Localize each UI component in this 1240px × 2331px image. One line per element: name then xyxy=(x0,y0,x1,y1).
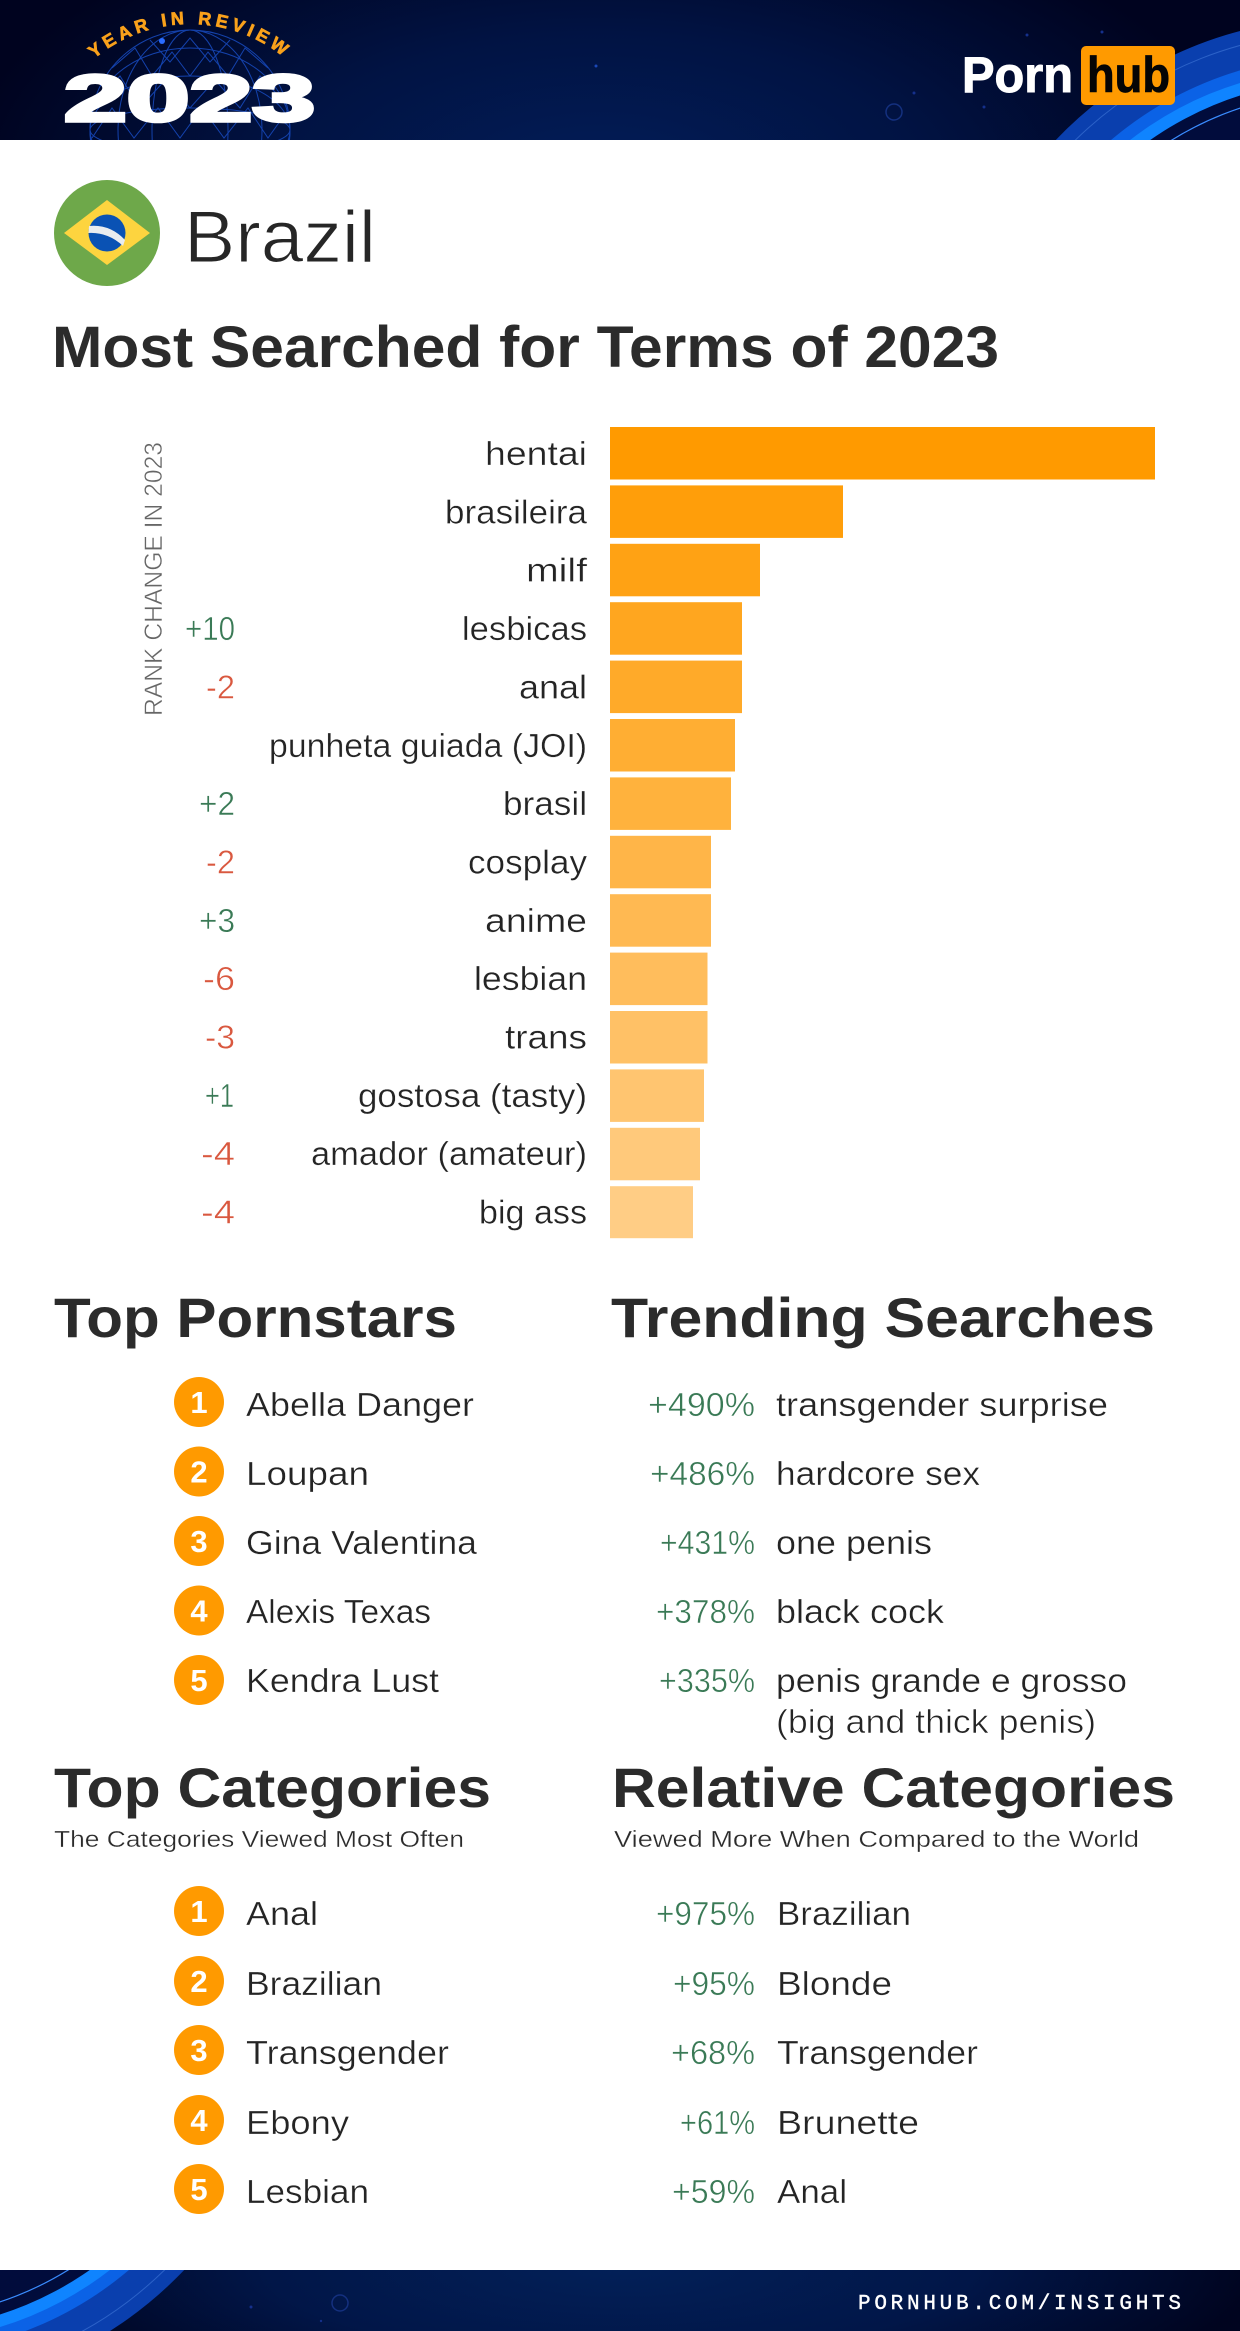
footer banner xyxy=(0,2270,1240,2331)
term labels: amador (amateur) xyxy=(311,1135,587,1172)
ranked list: Lesbian xyxy=(246,2173,369,2210)
term labels: anal xyxy=(519,668,587,705)
term labels: anime xyxy=(485,902,587,939)
trending list: +335% xyxy=(659,1662,755,1699)
ranked list xyxy=(174,1377,478,1705)
rank changes: +10 xyxy=(185,610,235,647)
trending list: black cock xyxy=(776,1593,945,1630)
title: Most Searched for Terms of 2023 xyxy=(52,315,999,380)
term labels: big ass xyxy=(479,1194,587,1231)
relative list: +68% xyxy=(671,2034,755,2071)
rank changes: -2 xyxy=(206,668,235,705)
term labels: brasileira xyxy=(445,493,588,530)
ranked list: Transgender xyxy=(246,2034,449,2071)
term labels: punheta guiada (JOI) xyxy=(269,727,587,764)
trending list: (big and thick penis) xyxy=(776,1703,1096,1740)
panel: top pornstars xyxy=(54,1286,478,1705)
ranked list: 4 xyxy=(190,1594,208,1628)
brand logo: hub xyxy=(1087,47,1170,103)
ranked list: Gina Valentina xyxy=(246,1524,478,1561)
header banner xyxy=(0,0,1240,140)
rank changes: -4 xyxy=(201,1135,235,1172)
heading: Trending Searches xyxy=(611,1286,1155,1349)
relative list: Blonde xyxy=(777,1965,892,2002)
ranked list: 1 xyxy=(190,1894,208,1929)
term labels: cosplay xyxy=(468,844,588,880)
decorative arcs top right xyxy=(594,30,1240,140)
ranked list: Brazilian xyxy=(246,1965,382,2002)
trending list xyxy=(648,1386,1127,1740)
rank changes: -4 xyxy=(201,1194,235,1231)
country heading xyxy=(54,180,376,286)
term labels: gostosa (tasty) xyxy=(358,1077,587,1114)
rank changes: -2 xyxy=(206,844,235,880)
rank change axis label: RANK CHANGE IN 2023 xyxy=(140,442,168,716)
relative list xyxy=(656,1895,978,2210)
relative list: +59% xyxy=(672,2173,755,2210)
subheading: The Categories Viewed Most Often xyxy=(54,1826,464,1852)
trending list: +486% xyxy=(650,1455,755,1492)
ranked list: Abella Danger xyxy=(246,1386,474,1423)
term labels: brasil xyxy=(503,785,587,822)
trending list: +490% xyxy=(648,1386,755,1423)
relative list: +95% xyxy=(673,1965,755,2002)
heading: Relative Categories xyxy=(612,1756,1175,1819)
rank changes: -6 xyxy=(203,960,235,997)
footer url: PORNHUB.COM/INSIGHTS xyxy=(858,2293,1181,2316)
panel: trending searches xyxy=(611,1286,1155,1740)
rank changes: +1 xyxy=(205,1077,234,1114)
trending list: hardcore sex xyxy=(776,1455,981,1492)
ranked list: 1 xyxy=(190,1385,208,1420)
brand logo: Porn xyxy=(962,47,1073,103)
trending list: transgender surprise xyxy=(776,1386,1108,1423)
rank changes: +2 xyxy=(199,785,235,822)
country heading: Brazil xyxy=(184,197,376,278)
term labels: milf xyxy=(526,552,588,589)
trending list: +378% xyxy=(656,1593,755,1630)
heading: Top Categories xyxy=(54,1756,491,1819)
ranked list: Alexis Texas xyxy=(246,1593,431,1630)
ranked list: 2 xyxy=(190,1454,208,1490)
ranked list xyxy=(174,1886,449,2214)
panel: relative categories xyxy=(612,1756,1175,2210)
icon: wireframe globe xyxy=(90,30,290,140)
2023 wordmark: 2023 xyxy=(64,61,315,135)
ranked list: Loupan xyxy=(246,1455,369,1492)
year in review arc label: YEAR IN REVIEW xyxy=(86,12,290,56)
subheading: Viewed More When Compared to the World xyxy=(614,1826,1139,1852)
bar chart: most searched terms xyxy=(185,427,1155,1238)
panel: top categories xyxy=(54,1756,491,2214)
rank changes xyxy=(185,610,235,1231)
ranked list: 2 xyxy=(190,1964,208,1999)
ranked list: 4 xyxy=(190,2103,208,2138)
ranked list: Anal xyxy=(246,1895,318,1932)
term labels: trans xyxy=(505,1018,587,1056)
ranked list: 5 xyxy=(190,1663,208,1698)
rank changes: +3 xyxy=(199,902,235,939)
ranked list: 5 xyxy=(190,2172,208,2207)
term labels: lesbian xyxy=(474,960,587,997)
term labels xyxy=(269,435,588,1231)
bars xyxy=(610,427,1155,1238)
trending list: penis grande e grosso xyxy=(776,1662,1127,1699)
icon: Brazil flag xyxy=(54,180,160,286)
ranked list: Kendra Lust xyxy=(246,1662,439,1699)
relative list: +61% xyxy=(680,2104,755,2141)
decorative arcs bottom left xyxy=(0,2270,349,2331)
heading: Top Pornstars xyxy=(54,1286,457,1349)
term labels: lesbicas xyxy=(462,610,587,647)
relative list: Brunette xyxy=(777,2104,919,2141)
term labels: hentai xyxy=(485,435,587,472)
relative list: Transgender xyxy=(777,2034,978,2071)
trending list: one penis xyxy=(776,1524,932,1561)
relative list: Brazilian xyxy=(777,1895,911,1932)
ranked list: Ebony xyxy=(246,2104,350,2141)
brand logo xyxy=(962,46,1175,105)
ranked list: 3 xyxy=(190,1524,208,1559)
rank changes: -3 xyxy=(205,1018,235,1056)
ranked list: 3 xyxy=(190,2033,208,2068)
relative list: Anal xyxy=(777,2173,847,2210)
relative list: +975% xyxy=(656,1895,755,1932)
trending list: +431% xyxy=(660,1524,755,1561)
